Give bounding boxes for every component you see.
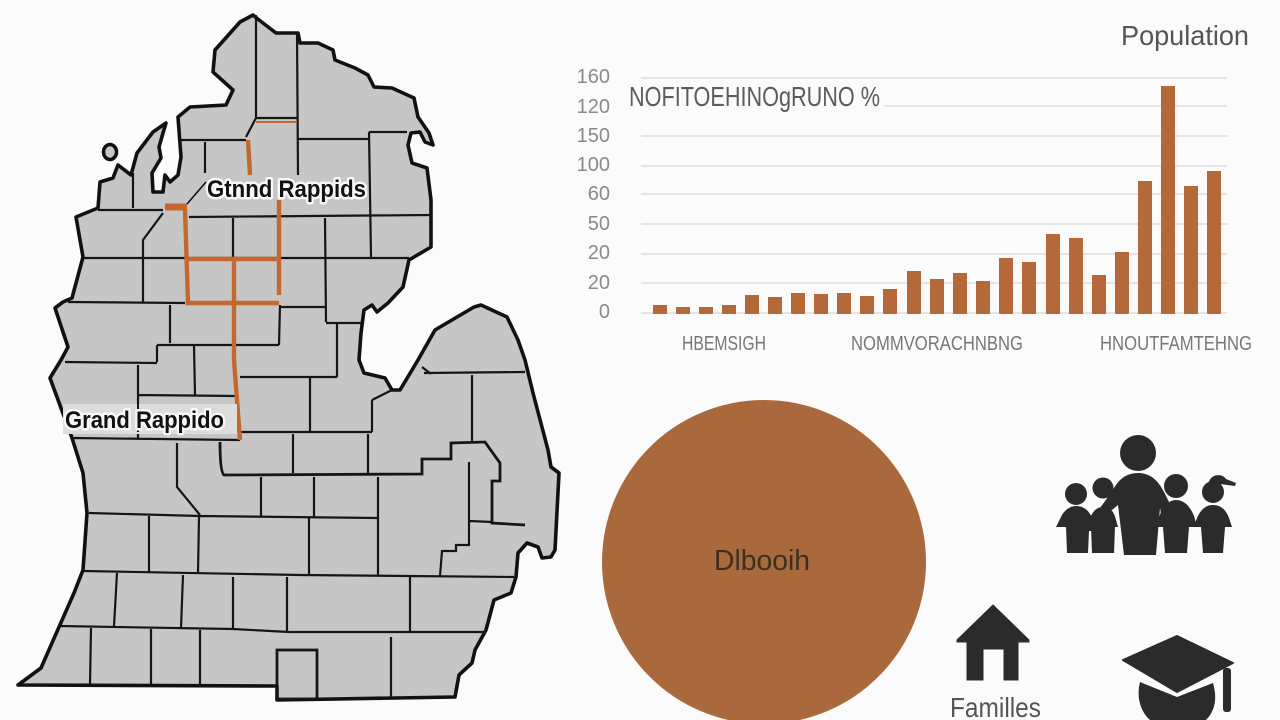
grid lines xyxy=(641,78,1227,313)
x axis labels xyxy=(682,333,1252,355)
x axis labels: HBEMSIGH xyxy=(682,333,766,355)
y axis labels: 150 xyxy=(577,125,610,147)
large brown circle xyxy=(602,400,926,720)
state outline xyxy=(18,15,559,700)
map label: lower Grand Rapids: Grand Rappido xyxy=(65,407,224,434)
circle label: Dlbooih xyxy=(714,545,810,577)
y axis labels: 50 xyxy=(588,213,610,235)
y axis labels: 20 xyxy=(588,272,610,294)
map label: upper Grand Rapids: Gtnnd Rappids xyxy=(207,176,366,203)
chart title: NOFITOEHINOgRUNO % xyxy=(629,81,880,112)
y axis labels: 0 xyxy=(599,301,610,323)
x axis labels: NOMMVORACHNBNG xyxy=(851,333,1023,355)
y axis labels: 120 xyxy=(577,96,610,118)
island xyxy=(104,144,116,160)
icon: house xyxy=(957,605,1029,680)
y axis labels xyxy=(577,66,610,323)
icon: family xyxy=(1056,435,1236,555)
highlighted orange route xyxy=(165,122,297,440)
icon: graduation cap xyxy=(1123,636,1233,720)
y axis labels: 160 xyxy=(577,66,610,88)
y axis labels: 100 xyxy=(577,154,610,176)
map of Michigan lower peninsula xyxy=(18,15,559,700)
county boundaries xyxy=(59,15,525,699)
bar chart xyxy=(577,66,1252,355)
x axis labels: HNOUTFAMTEHNG xyxy=(1100,333,1252,355)
heading: Population: Population xyxy=(1121,20,1249,51)
y axis labels: 20 xyxy=(588,242,610,264)
bars xyxy=(653,86,1221,314)
y axis labels: 60 xyxy=(588,183,610,205)
